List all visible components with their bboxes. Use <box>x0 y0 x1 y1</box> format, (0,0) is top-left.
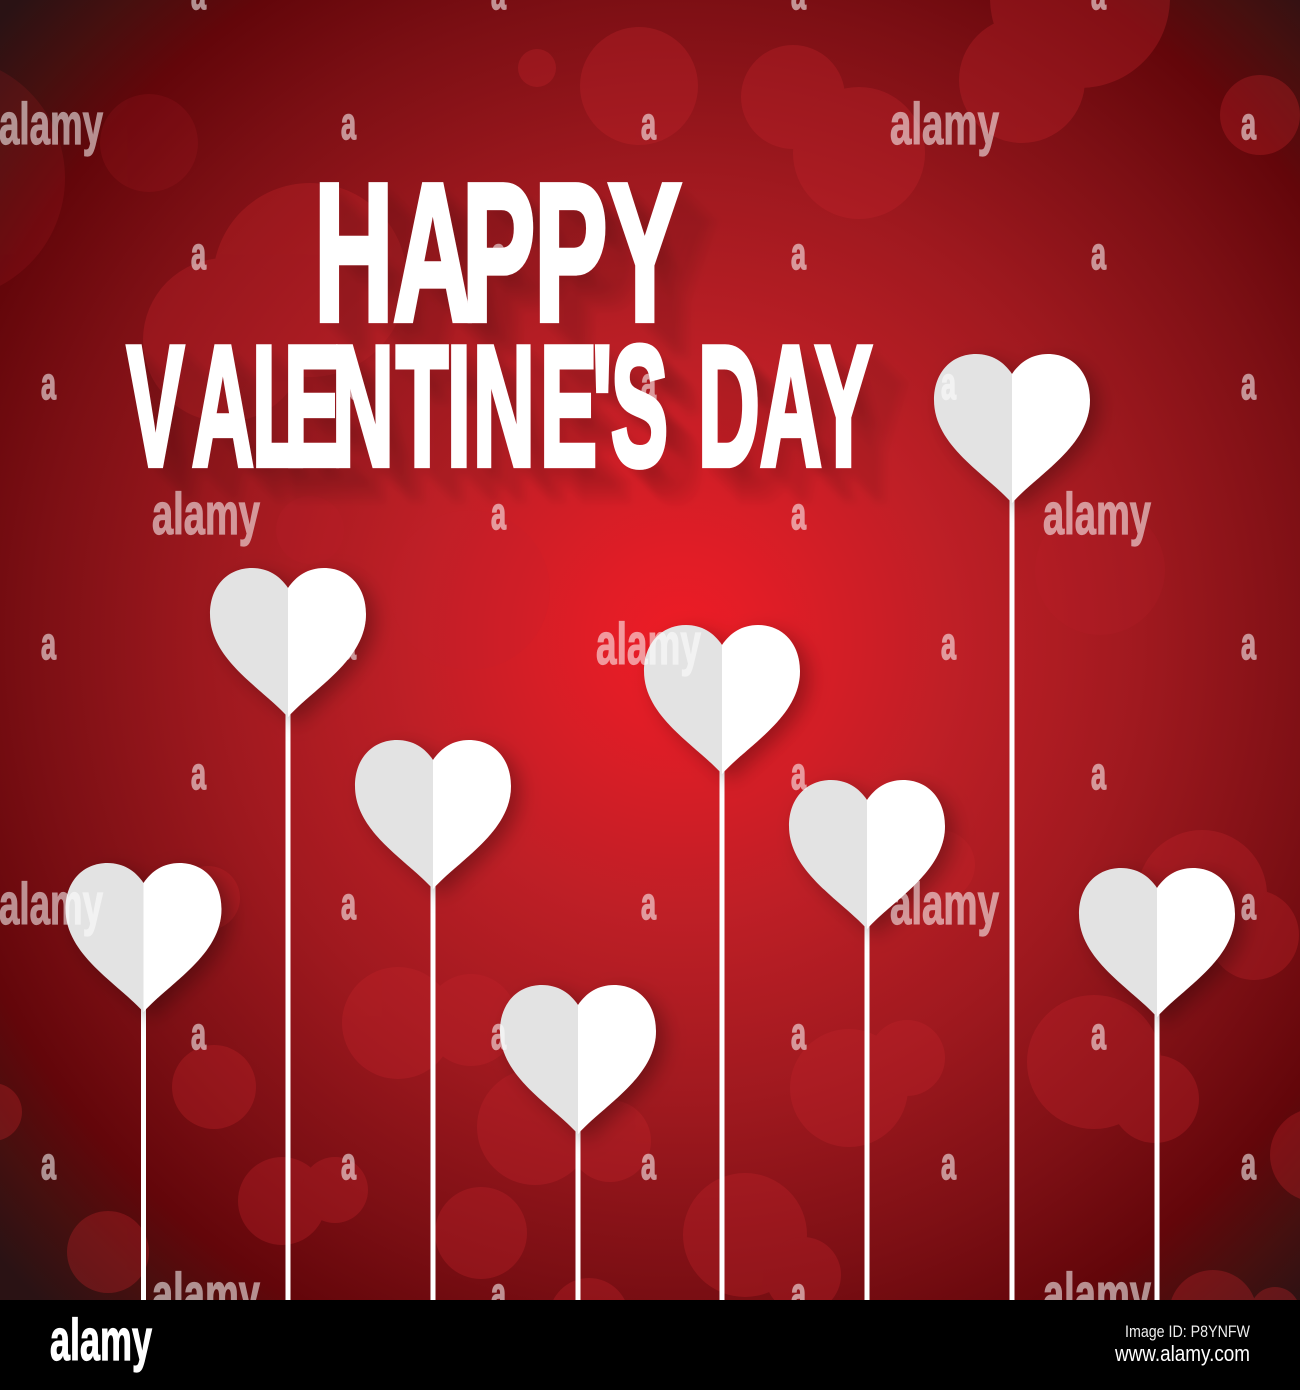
title line 2: VALENTINE'S DAY <box>127 311 872 502</box>
heart balloon 1 <box>66 863 222 1300</box>
heart balloon 3 <box>355 740 511 1300</box>
watermark overlay: aaa <box>341 98 1256 149</box>
watermark overlay: aa <box>491 1268 806 1319</box>
watermark overlay: aaaa <box>191 1008 1106 1059</box>
heart balloon 6 <box>789 780 945 1300</box>
faint bokeh circles <box>0 70 198 286</box>
heart balloon 2 <box>210 568 366 1300</box>
watermark overlay: aaaaa <box>41 358 1256 409</box>
title line 1: HAPPY <box>314 142 681 362</box>
image id: Image ID: P8YNFW <box>1125 1322 1250 1341</box>
watermark overlay: aaaa <box>191 748 1106 799</box>
watermark overlay: alamy <box>0 872 103 937</box>
watermark overlay: alamy <box>1043 1262 1151 1327</box>
title: Happy Valentine's Day <box>127 142 872 502</box>
heart balloon 7 <box>934 354 1090 1300</box>
watermark overlay: alamy <box>1043 482 1151 547</box>
watermark overlay: alamy <box>890 92 999 157</box>
bottom black credit bar <box>0 1300 1300 1390</box>
website: www.alamy.com <box>1114 1341 1250 1366</box>
watermark overlay: alamy <box>0 92 103 157</box>
watermark overlay: aaaa <box>41 618 1256 669</box>
watermark overlay: aaa <box>341 878 1256 929</box>
watermark overlay: alamy <box>152 482 260 547</box>
watermark overlay: alamy <box>890 872 999 937</box>
watermark overlay: aaaaa <box>41 1138 1256 1189</box>
heart balloon 4 <box>500 985 656 1300</box>
watermark overlay: alamy <box>152 1262 260 1327</box>
watermark overlay: alamy <box>596 612 701 677</box>
watermark overlay: aa <box>491 488 806 539</box>
heart balloon 8 <box>1079 868 1235 1300</box>
heart balloon 5 <box>644 625 800 1300</box>
alamy logo: alamy <box>50 1308 152 1373</box>
watermark overlay: aaaa <box>191 228 1106 279</box>
